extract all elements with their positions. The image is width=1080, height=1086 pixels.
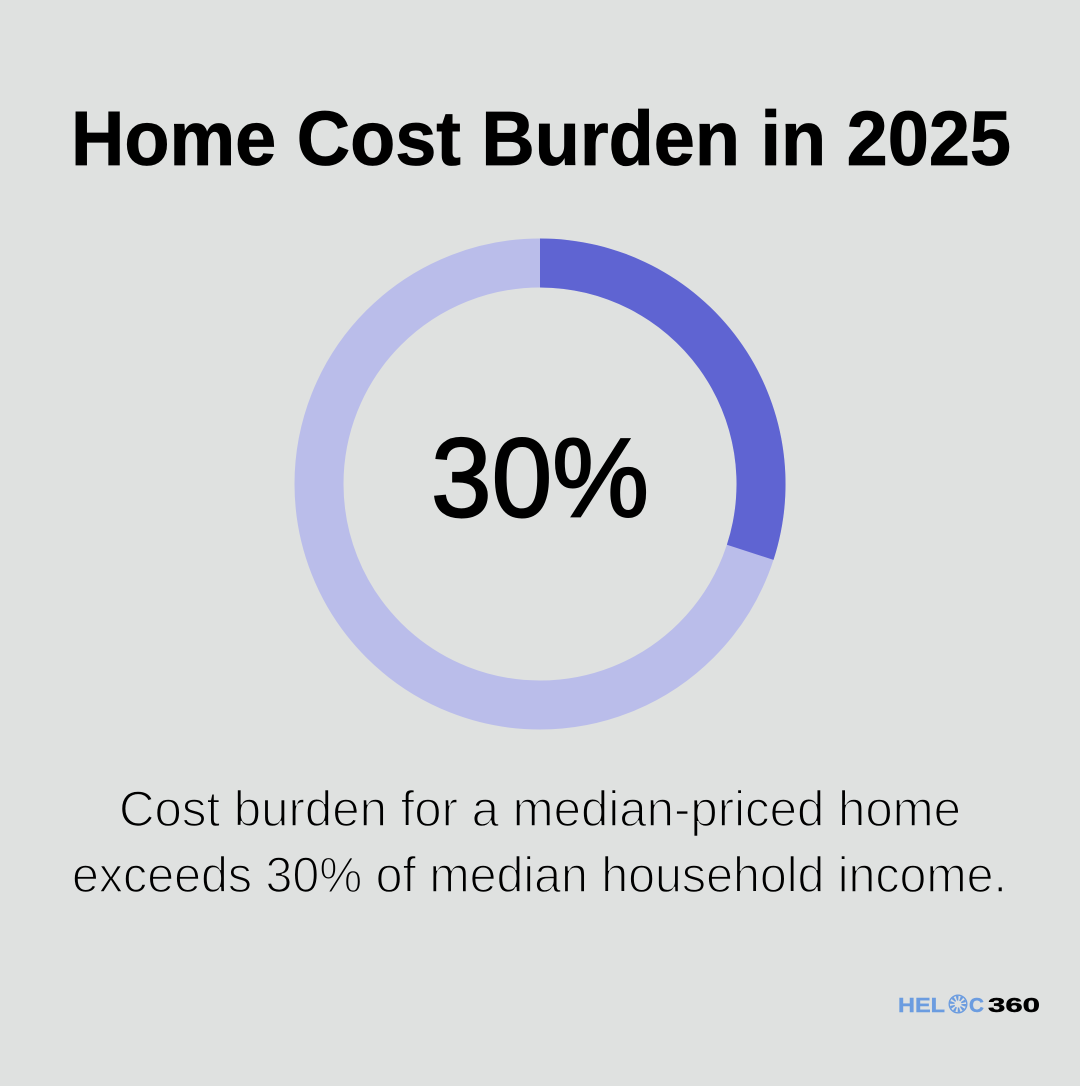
donut chart: 30% <box>319 238 786 705</box>
center value: 30% <box>431 416 649 540</box>
logo number: 360: 360 <box>988 995 1040 1017</box>
logo word: HEL: HEL <box>898 995 945 1017</box>
donut value segment <box>540 238 786 560</box>
title: Home Cost Burden in 2025 <box>71 96 1011 182</box>
description text: exceeds 30% of median household income. <box>72 847 1007 903</box>
description text <box>72 781 1007 903</box>
logo icon: swirl O <box>949 995 967 1013</box>
logo: HELOC360 <box>898 995 1040 1017</box>
donut track <box>319 263 761 705</box>
logo word: C: C <box>969 995 984 1017</box>
description text: Cost burden for a median-priced home <box>119 781 961 837</box>
